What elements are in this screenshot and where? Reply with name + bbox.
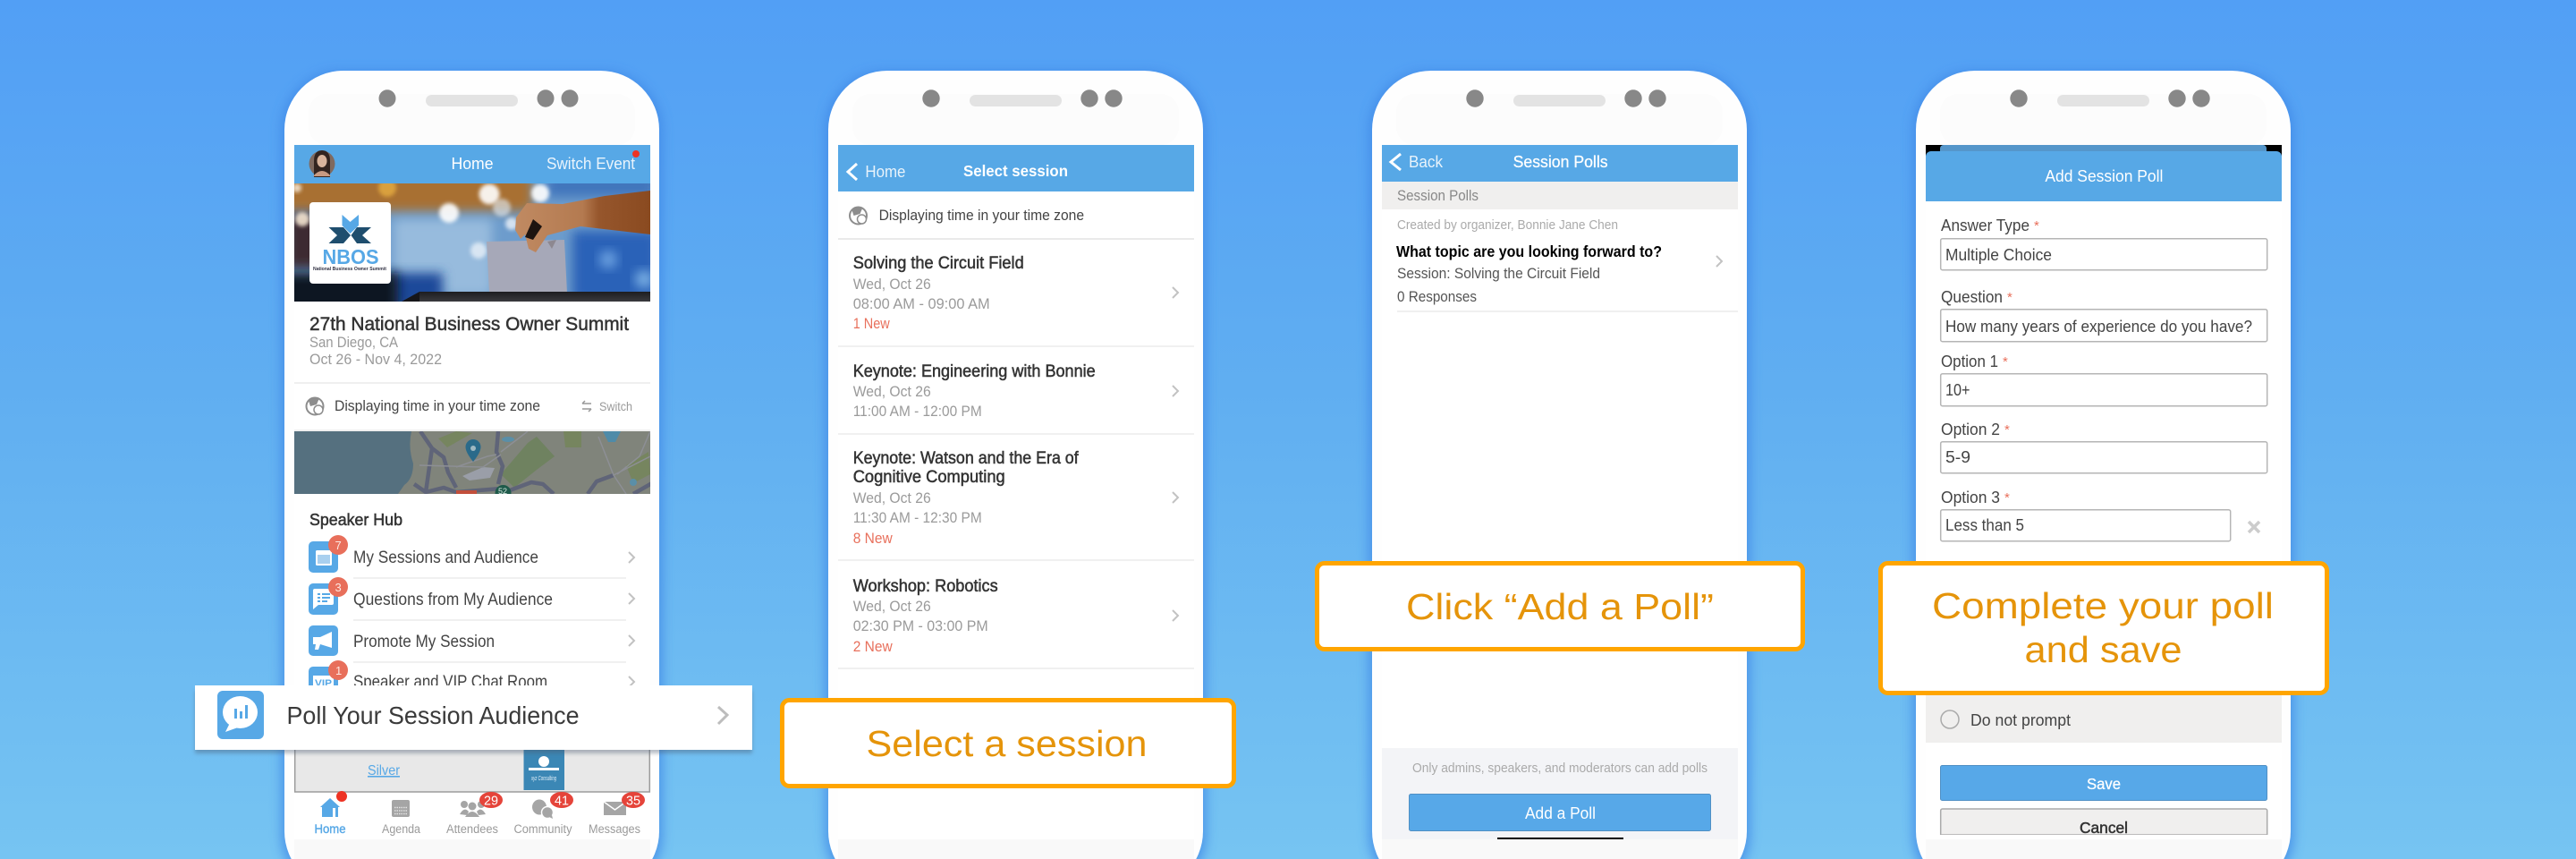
callout: poll your session audience bbox=[195, 685, 752, 753]
event banner photo bbox=[294, 183, 650, 302]
callout: select a session bbox=[782, 700, 1234, 786]
tab: community bbox=[513, 792, 573, 836]
poll item: What topic are you looking forward to? bbox=[1396, 242, 1662, 260]
session: watson: Cognitive Computing bbox=[853, 468, 1005, 487]
field: option 3: * bbox=[2004, 490, 2010, 506]
field: option 3 bbox=[1941, 488, 2259, 541]
session: solving the circuit field: Solving the Circuit Field bbox=[853, 254, 1024, 273]
tab: attendees: Attendees bbox=[446, 822, 498, 836]
event title block bbox=[309, 313, 629, 368]
field: option 3: Option 3 bbox=[1941, 488, 2000, 506]
panel: phone 1 home screen bbox=[281, 71, 663, 859]
home header bar bbox=[294, 145, 650, 183]
add a poll button: Add a Poll bbox=[1525, 804, 1596, 822]
select session header: Select session bbox=[963, 162, 1068, 180]
event title block: San Diego, CA bbox=[309, 334, 399, 351]
row: questions: Questions from My Audience bbox=[353, 590, 553, 609]
callout: complete your poll and save: and save bbox=[2025, 629, 2182, 670]
speaker hub heading: Speaker Hub bbox=[309, 511, 402, 529]
callout: complete your poll and save: Complete your poll bbox=[1932, 585, 2274, 626]
select session header: Home bbox=[865, 163, 905, 181]
session: engineering with bonnie bbox=[853, 362, 1178, 420]
phone 2 camera and speaker bbox=[922, 89, 1123, 107]
callout: select a session: Select a session bbox=[866, 723, 1147, 764]
field: answer type: * bbox=[2034, 218, 2039, 234]
avatar bbox=[309, 150, 335, 177]
select session header bbox=[838, 145, 1194, 191]
add poll footer bbox=[1382, 748, 1738, 839]
home header bar: Home bbox=[451, 155, 494, 173]
tab: community: 41 bbox=[555, 793, 569, 809]
save button bbox=[1941, 766, 2267, 800]
session: robotics: 02:30 PM - 03:00 PM bbox=[853, 617, 988, 634]
field: answer type: Answer Type bbox=[1941, 216, 2029, 234]
map bbox=[294, 431, 650, 494]
session: watson: 8 New bbox=[853, 530, 893, 547]
field: option 1: 10+ bbox=[1945, 380, 1970, 399]
session: engineering with bonnie: Keynote: Engineering with Bonnie bbox=[853, 362, 1096, 381]
map: 52 bbox=[498, 487, 507, 496]
session: watson: Wed, Oct 26 bbox=[853, 489, 931, 506]
hand bbox=[515, 191, 650, 252]
field: question: * bbox=[2007, 290, 2012, 305]
field: question: How many years of experience do you have? bbox=[1945, 317, 2252, 336]
session: robotics: Workshop: Robotics bbox=[853, 577, 998, 596]
field: option 2: * bbox=[2004, 422, 2010, 438]
prompt option band: Do not prompt bbox=[1970, 711, 2071, 729]
field: option 2: Option 2 bbox=[1941, 420, 2000, 438]
field: option 1: Option 1 bbox=[1941, 352, 1998, 370]
poll item: Session: Solving the Circuit Field bbox=[1397, 265, 1600, 282]
row: my sessions: My Sessions and Audience bbox=[353, 548, 538, 567]
field: question: Question bbox=[1941, 287, 2003, 306]
icon: globe clock bbox=[850, 207, 867, 224]
sponsor strip bbox=[295, 743, 649, 792]
session polls band bbox=[1382, 182, 1738, 209]
tab: messages: Messages bbox=[589, 822, 640, 836]
session: engineering with bonnie: Wed, Oct 26 bbox=[853, 383, 931, 400]
event title block: 27th National Business Owner Summit bbox=[309, 313, 629, 335]
add session poll header bbox=[1926, 145, 2282, 201]
NBOS logo card bbox=[309, 202, 391, 284]
icon: globe clock bbox=[306, 397, 324, 415]
poll item: 0 Responses bbox=[1397, 288, 1477, 305]
row: speaker and VIP chat bbox=[309, 660, 634, 697]
poll item bbox=[1396, 217, 1722, 305]
tab: messages bbox=[589, 792, 645, 836]
row: speaker and VIP chat: 1 bbox=[335, 664, 342, 677]
row: my sessions: 7 bbox=[335, 539, 342, 552]
field: answer type: Multiple Choice bbox=[1945, 245, 2052, 264]
callout: click add a poll: Click “Add a Poll” bbox=[1406, 586, 1714, 627]
callout: poll your session audience: Poll Your Session Audience bbox=[286, 702, 580, 729]
phone 1 camera and speaker bbox=[379, 89, 578, 107]
time zone row bbox=[306, 397, 632, 415]
session polls header: Back bbox=[1409, 153, 1444, 171]
row: promote: Promote My Session bbox=[353, 632, 495, 651]
row: questions bbox=[309, 577, 634, 615]
tab: community: Community bbox=[513, 822, 572, 836]
tab: home: Home bbox=[315, 822, 345, 836]
ballot paper bbox=[487, 240, 567, 293]
save button: Save bbox=[2087, 775, 2121, 793]
panel: phone 3 session polls bbox=[1368, 71, 1750, 859]
row: speaker and VIP chat: Speaker and VIP Chat Room bbox=[353, 672, 547, 692]
poll item: Created by organizer, Bonnie Jane Chen bbox=[1397, 217, 1618, 233]
session: watson bbox=[853, 449, 1178, 547]
row: promote bbox=[309, 625, 634, 656]
phone 3 camera and speaker bbox=[1466, 89, 1666, 107]
session: robotics bbox=[853, 577, 1178, 655]
NBOS logo card: National Business Owner Summit bbox=[313, 267, 386, 272]
field: answer type bbox=[1941, 216, 2267, 270]
field: option 1: * bbox=[2003, 354, 2008, 370]
sponsor strip: xyz Consulting bbox=[530, 776, 556, 782]
callout: click add a poll bbox=[1317, 564, 1803, 650]
time zone row: Switch bbox=[599, 399, 632, 413]
icon: poll chat bubble bbox=[217, 691, 264, 739]
tab: messages: 35 bbox=[626, 793, 640, 809]
panel: phone 2 select session bbox=[825, 71, 1207, 859]
callout: complete your poll and save bbox=[1880, 564, 2327, 693]
session polls header bbox=[1382, 145, 1738, 182]
prompt option band bbox=[1926, 689, 2282, 743]
field: option 2: 5-9 bbox=[1945, 447, 1970, 466]
NBOS logo card: NBOS bbox=[322, 245, 379, 268]
cancel button: Cancel bbox=[2080, 819, 2128, 837]
field: question bbox=[1941, 287, 2267, 342]
session polls band: Session Polls bbox=[1397, 187, 1479, 204]
field: option 2 bbox=[1941, 420, 2267, 473]
tab: home bbox=[315, 791, 347, 836]
row: questions: 3 bbox=[335, 581, 342, 594]
add a poll button bbox=[1410, 795, 1710, 830]
tab: agenda bbox=[382, 800, 420, 836]
sponsor strip: Silver bbox=[368, 763, 401, 778]
session: solving the circuit field: Wed, Oct 26 bbox=[853, 276, 931, 293]
session: engineering with bonnie: 11:00 AM - 12:00 PM bbox=[853, 403, 982, 420]
cancel button bbox=[1926, 809, 2282, 839]
row: my sessions bbox=[309, 535, 634, 573]
ballot box edge bbox=[402, 292, 650, 302]
session: solving the circuit field bbox=[853, 254, 1178, 332]
bottom tab bar bbox=[315, 791, 645, 836]
field: option 1 bbox=[1941, 352, 2267, 406]
home header bar: Switch Event bbox=[547, 155, 635, 173]
session: robotics: Wed, Oct 26 bbox=[853, 598, 931, 615]
session: solving the circuit field: 1 New bbox=[853, 315, 890, 332]
tab: agenda: Agenda bbox=[382, 822, 420, 836]
time zone row: Displaying time in your time zone bbox=[335, 397, 540, 414]
event title block: Oct 26 - Nov 4, 2022 bbox=[309, 351, 442, 368]
row: speaker and VIP chat: VIP bbox=[315, 678, 332, 689]
session polls header: Session Polls bbox=[1513, 153, 1608, 171]
field: option 3: Less than 5 bbox=[1945, 516, 2024, 534]
add poll footer: Only admins, speakers, and moderators can add polls bbox=[1412, 761, 1707, 776]
time zone row: Displaying time in your time zone bbox=[879, 207, 1084, 224]
phone 4 camera and speaker bbox=[2010, 89, 2210, 107]
panel: phone 4 add session poll bbox=[1912, 71, 2294, 859]
add session poll header: Add Session Poll bbox=[2045, 166, 2163, 185]
tab: attendees bbox=[446, 792, 503, 836]
tab: attendees: 29 bbox=[484, 793, 498, 809]
session: watson: Keynote: Watson and the Era of bbox=[853, 449, 1079, 468]
session: robotics: 2 New bbox=[853, 638, 893, 655]
session: watson: 11:30 AM - 12:30 PM bbox=[853, 509, 982, 526]
session: solving the circuit field: 08:00 AM - 09:00 AM bbox=[853, 295, 990, 312]
